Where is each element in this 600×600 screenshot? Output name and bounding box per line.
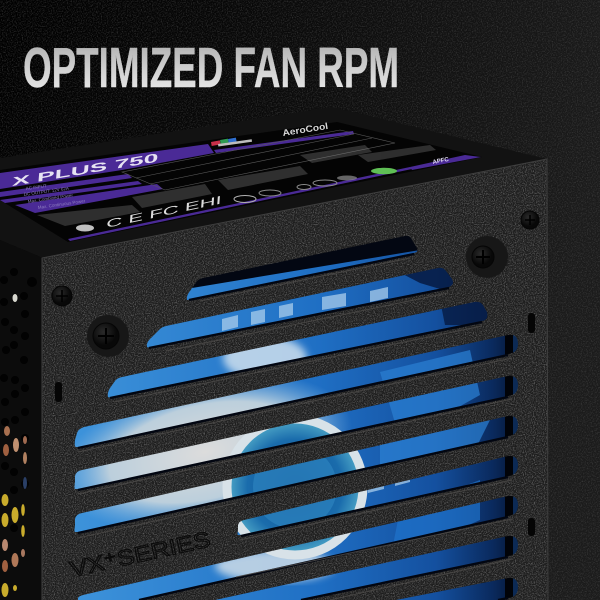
label: purple bands <box>0 131 481 241</box>
panel: top face of power supply <box>0 107 547 258</box>
slot lower lip highlights <box>78 258 512 600</box>
front plate <box>42 159 548 600</box>
fan hub ring <box>232 424 358 550</box>
screw: upper left recessed <box>87 315 129 357</box>
spec lines: AC INPUT <box>25 183 47 191</box>
logo: 80 Plus tag: APFC <box>432 157 450 166</box>
dark upper inner wall of top slots <box>192 236 418 288</box>
certification marks <box>76 168 397 232</box>
screw: upper right recessed <box>466 236 508 278</box>
spec lines: Max. Continuous Power <box>37 198 86 210</box>
screw: upper right small <box>521 211 539 229</box>
title: OPTIMIZED FAN RPM <box>23 36 399 100</box>
yellow wires seen through holes <box>2 494 25 597</box>
logo: RGB <box>211 138 252 146</box>
spec lines: DC OUTPUT: 12V 62A <box>23 186 69 197</box>
screw: upper left small <box>52 286 72 306</box>
fan seen through vent slots <box>74 236 518 600</box>
copper windings seen through holes <box>2 294 27 572</box>
certification marks: C E FC EHI <box>106 194 222 231</box>
model name: X PLUS 750 <box>12 150 159 189</box>
logo: Aerocool: AeroCool <box>282 121 329 138</box>
small pale blocks on upper blades <box>222 287 410 493</box>
spec lines <box>23 183 86 210</box>
spec lines: Max. Combined Power <box>27 193 74 204</box>
fan blade shapes <box>380 350 480 420</box>
dark right ends of slots <box>505 320 513 600</box>
embossed series name: VX⁺SERIES <box>68 527 213 582</box>
slot bottom shadows <box>78 254 508 600</box>
fan blade highlights <box>74 381 348 523</box>
small mounting notches <box>55 313 535 536</box>
side perforation holes <box>0 268 37 532</box>
panel: perforated side <box>0 240 43 600</box>
plate edge highlights <box>42 159 548 600</box>
panel: front face with vent grille <box>42 159 548 600</box>
fine print blocks <box>37 145 436 226</box>
spec table <box>122 130 395 190</box>
icon: green leaf mark <box>371 168 397 174</box>
